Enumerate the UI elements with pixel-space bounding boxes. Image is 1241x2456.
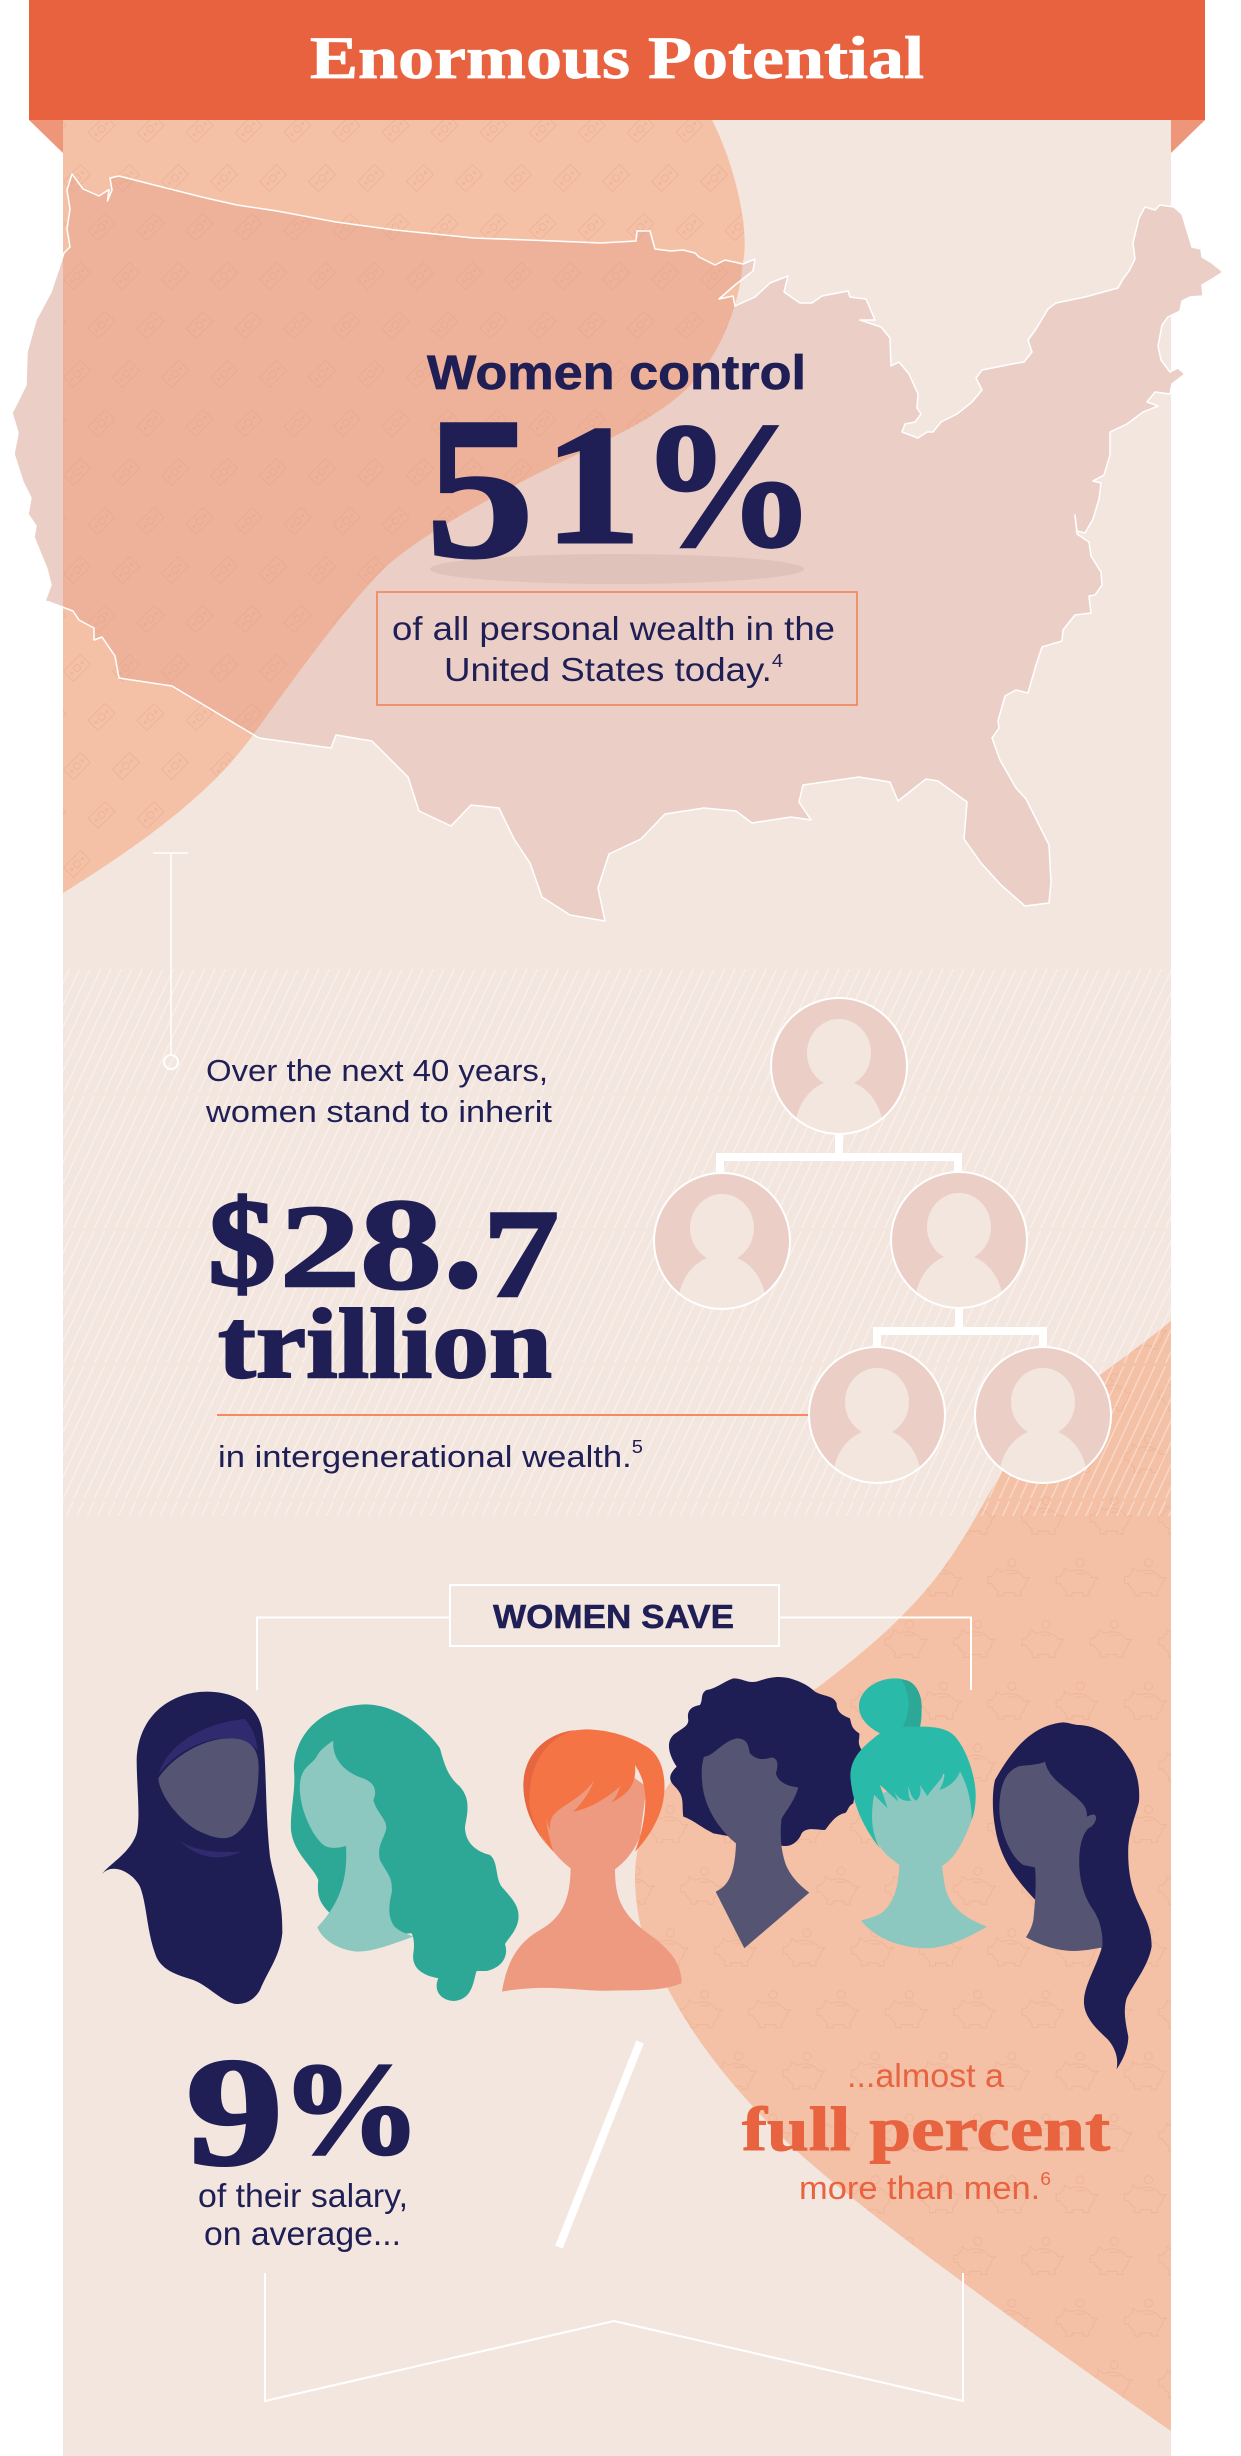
title: Enormous Potential xyxy=(310,25,924,91)
women save bracket xyxy=(257,1618,971,1690)
text: over the next 40 years: women stand to inherit xyxy=(205,1094,552,1129)
stat: 28.7 trillion: 7 xyxy=(483,1185,559,1324)
heading: women control: Women control xyxy=(427,347,806,400)
shape: bottom peach blob xyxy=(630,1320,1171,2435)
stat: 28.7 trillion: trillion xyxy=(218,1288,552,1399)
text: almost a full percent more than men: more than men. xyxy=(799,2170,1023,2206)
background: hatched band xyxy=(63,969,1171,1516)
timeline marker xyxy=(153,853,188,1069)
family tree portrait 4 xyxy=(809,1347,945,1529)
text: almost a full percent more than men: 6 xyxy=(1040,2169,1051,2189)
icon: woman in hijab xyxy=(102,1692,282,2004)
shadow under 51 percent xyxy=(430,554,804,584)
text: almost a full percent more than men: ...almost a xyxy=(847,2057,1005,2094)
stat: 28.7 trillion xyxy=(208,1143,559,1399)
stat: 28.7 trillion: $ xyxy=(208,1175,276,1313)
map: United States xyxy=(12,120,1223,921)
family tree portrait 2 xyxy=(654,1173,790,1355)
family tree connectors xyxy=(720,1135,1043,1346)
banner folds xyxy=(29,120,1205,153)
icon: woman with curly hair xyxy=(669,1677,862,1948)
text: of their salary xyxy=(198,2177,408,2252)
text: intergenerational wealth: 5 xyxy=(632,1437,643,1457)
stat: 9 percent: % xyxy=(281,2037,421,2182)
text: almost a full percent more than men: full percent xyxy=(742,2096,1110,2164)
stat: 28.7 trillion: 2 xyxy=(280,1181,360,1312)
heading: women save xyxy=(450,1585,779,1646)
text: intergenerational wealth: in intergenerational wealth. xyxy=(218,1439,589,1474)
stat: 51 percent: % xyxy=(640,386,816,584)
text: over the next 40 years: Over the next 40 years, xyxy=(206,1053,548,1088)
text: of their salary: on average... xyxy=(204,2215,401,2252)
text: almost a full percent more than men xyxy=(742,2057,1110,2206)
shape: top peach blob xyxy=(63,120,745,893)
text: of their salary: of their salary, xyxy=(198,2177,408,2214)
family tree portrait 3 xyxy=(891,1172,1027,1354)
callout box: personal wealth: 4 xyxy=(772,651,783,671)
bottom ribbon outline xyxy=(265,2273,963,2401)
family tree portrait 1 xyxy=(771,998,907,1180)
slash divider xyxy=(559,2042,640,2247)
callout box: personal wealth: of all personal wealth in the xyxy=(392,610,835,647)
callout box: personal wealth xyxy=(377,592,857,705)
divider line xyxy=(217,1414,809,1416)
text: over the next 40 years xyxy=(205,1053,552,1129)
icon: woman with teal hair bun xyxy=(850,1678,987,1948)
stat: 51 percent: 5 xyxy=(426,376,534,600)
family tree portrait 5 xyxy=(975,1347,1111,1529)
stat: 9 percent: 9 xyxy=(186,2026,283,2198)
banner xyxy=(29,0,1205,120)
heading: women save: WOMEN SAVE xyxy=(493,1598,734,1635)
stat: 51 percent: 1 xyxy=(544,391,641,579)
icon: woman with long dark ponytail xyxy=(993,1722,1152,2069)
stat: 28.7 trillion: . xyxy=(443,1143,483,1321)
icon: woman with long wavy green hair xyxy=(291,1704,519,2001)
stat: 28.7 trillion: 8 xyxy=(360,1173,442,1317)
icon: woman with short orange hair xyxy=(502,1729,682,1992)
callout box: personal wealth: United States today. xyxy=(444,651,739,688)
